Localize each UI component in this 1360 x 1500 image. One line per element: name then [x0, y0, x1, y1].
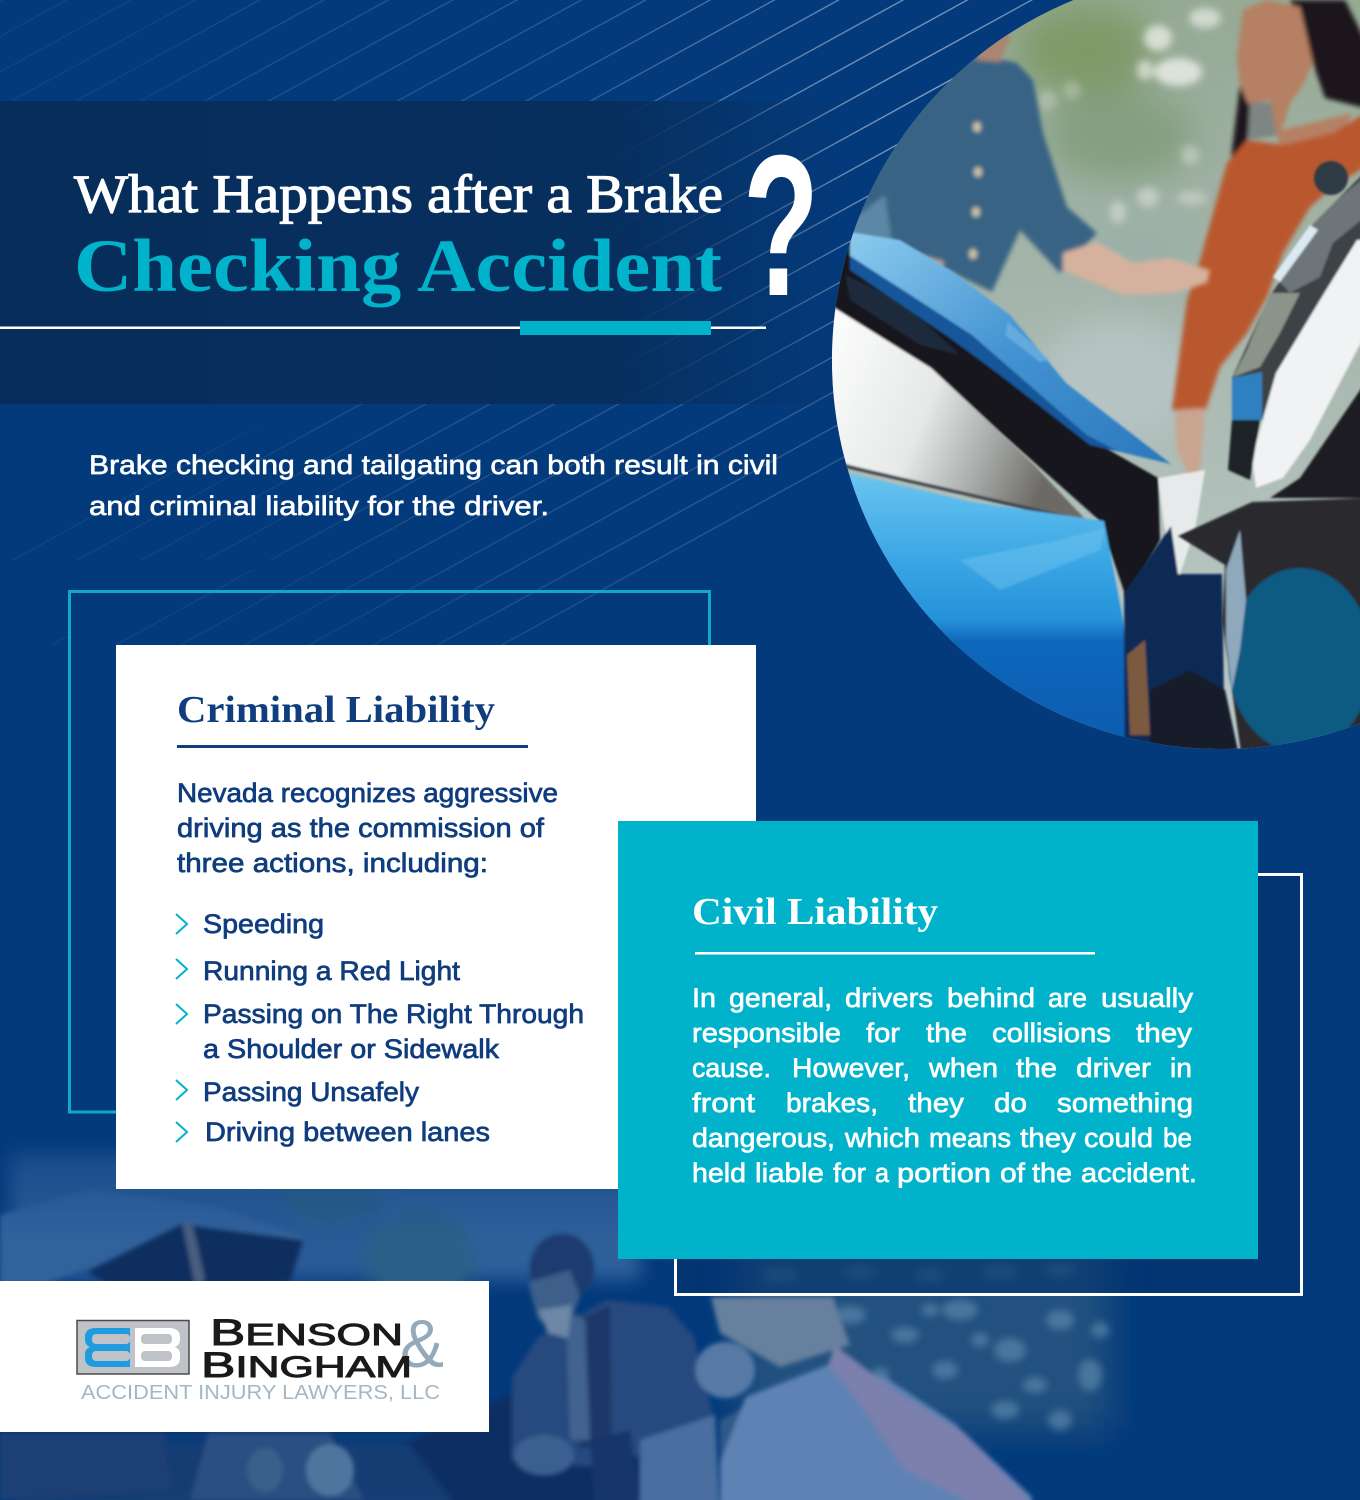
list chevrons: [176, 914, 187, 1142]
bent hood: [850, 232, 1171, 464]
blurred background: [820, 0, 1360, 760]
aggressive driving list: Speeding: [203, 909, 324, 939]
civil body text: accident.: [1081, 1158, 1197, 1188]
civil body text: be: [1163, 1123, 1192, 1153]
panel: civil liability: [618, 821, 1258, 1259]
civil body text: are: [1048, 983, 1087, 1013]
criminal heading: Criminal Liability: [177, 689, 495, 731]
civil body text: In: [692, 983, 716, 1013]
criminal intro text: three actions, including:: [177, 848, 488, 878]
centre gap: [1124, 470, 1240, 760]
aggressive driving list: Passing Unsafely: [203, 1077, 420, 1107]
woman: [1172, 0, 1360, 482]
civil body text: behind: [947, 983, 1035, 1013]
aggressive driving list: [203, 909, 584, 1147]
civil body text: in: [1170, 1053, 1192, 1083]
aggressive driving list: Running a Red Light: [203, 956, 461, 986]
intro text: and criminal liability for the driver.: [89, 491, 549, 521]
civil body text: portion: [897, 1158, 991, 1188]
background photo: couple after the accident: [0, 1150, 1110, 1500]
logo name: [201, 1312, 412, 1385]
photo: drivers arguing beside crashed cars: [820, 0, 1360, 770]
civil body text: front: [692, 1088, 756, 1118]
logo name: B INGHAM: [201, 1346, 412, 1385]
civil body text: means: [929, 1123, 1011, 1153]
civil body text: driver: [1076, 1053, 1151, 1083]
logo name: B ENSON: [210, 1312, 403, 1353]
woman in pink jacket: [695, 1297, 1032, 1500]
civil liability frame: [676, 874, 1302, 1294]
title line two: Checking Accident: [74, 225, 722, 308]
criminal intro text: [177, 778, 558, 878]
civil body text: drivers: [845, 983, 933, 1013]
civil body text: the: [926, 1018, 967, 1048]
civil body text: [692, 983, 1197, 1188]
criminal intro text: driving as the commission of: [177, 813, 545, 843]
intro text: Brake checking and tailgating can both result in civil: [89, 450, 778, 480]
title underline: [0, 321, 766, 335]
criminal intro text: Nevada recognizes aggressive: [177, 778, 558, 808]
civil body text: liable: [755, 1158, 824, 1188]
headlight: [825, 302, 1087, 521]
man in suit: [408, 1234, 720, 1500]
blue car: [825, 232, 1171, 770]
civil body text: something: [1057, 1088, 1193, 1118]
civil body text: collisions: [992, 1018, 1111, 1048]
civil body text: the: [1032, 1158, 1072, 1188]
question mark: ?: [743, 113, 819, 338]
man: [845, 35, 1210, 295]
civil body text: for: [866, 1018, 900, 1048]
civil body text: brakes,: [786, 1088, 878, 1118]
title band: [0, 101, 850, 404]
front bumper: [848, 472, 1128, 738]
logo ampersand: &: [400, 1306, 444, 1382]
civil body text: held: [692, 1158, 746, 1188]
foliage: [762, 1262, 1109, 1430]
intro text: [89, 450, 778, 521]
civil body text: of: [1000, 1158, 1026, 1188]
civil body text: for: [833, 1158, 866, 1188]
civil body text: responsible: [692, 1018, 841, 1048]
aggressive driving list: a Shoulder or Sidewalk: [203, 1034, 500, 1064]
civil body text: usually: [1101, 983, 1194, 1013]
civil body text: cause.: [692, 1053, 771, 1083]
wrecked car hood: [0, 1190, 364, 1500]
logo tagline: ACCIDENT INJURY LAWYERS, LLC: [81, 1381, 440, 1404]
aggressive driving list: Driving between lanes: [205, 1117, 490, 1147]
civil body text: do: [994, 1088, 1027, 1118]
title line one: What Happens after a Brake: [74, 164, 723, 224]
engine bay: [825, 232, 1160, 600]
civil heading: Civil Liability: [692, 891, 938, 933]
aggressive driving list: Passing on The Right Through: [203, 999, 584, 1029]
civil body text: they: [1020, 1123, 1077, 1153]
dark car: [1178, 161, 1360, 760]
logo panel: [0, 1281, 489, 1432]
panel: criminal liability: [116, 645, 756, 1189]
icon: BB monogram: [77, 1320, 189, 1374]
civil body text: could: [1084, 1123, 1153, 1153]
civil body text: which: [844, 1123, 920, 1153]
civil body text: However,: [792, 1053, 910, 1083]
title: [74, 113, 819, 338]
civil body text: they: [908, 1088, 965, 1118]
civil body text: when: [928, 1053, 998, 1083]
civil body text: the: [1016, 1053, 1057, 1083]
civil body text: they: [1136, 1018, 1193, 1048]
civil body text: general,: [729, 983, 832, 1013]
civil body text: a: [875, 1158, 889, 1188]
criminal liability frame: [70, 592, 710, 1112]
civil body text: dangerous,: [692, 1123, 835, 1153]
